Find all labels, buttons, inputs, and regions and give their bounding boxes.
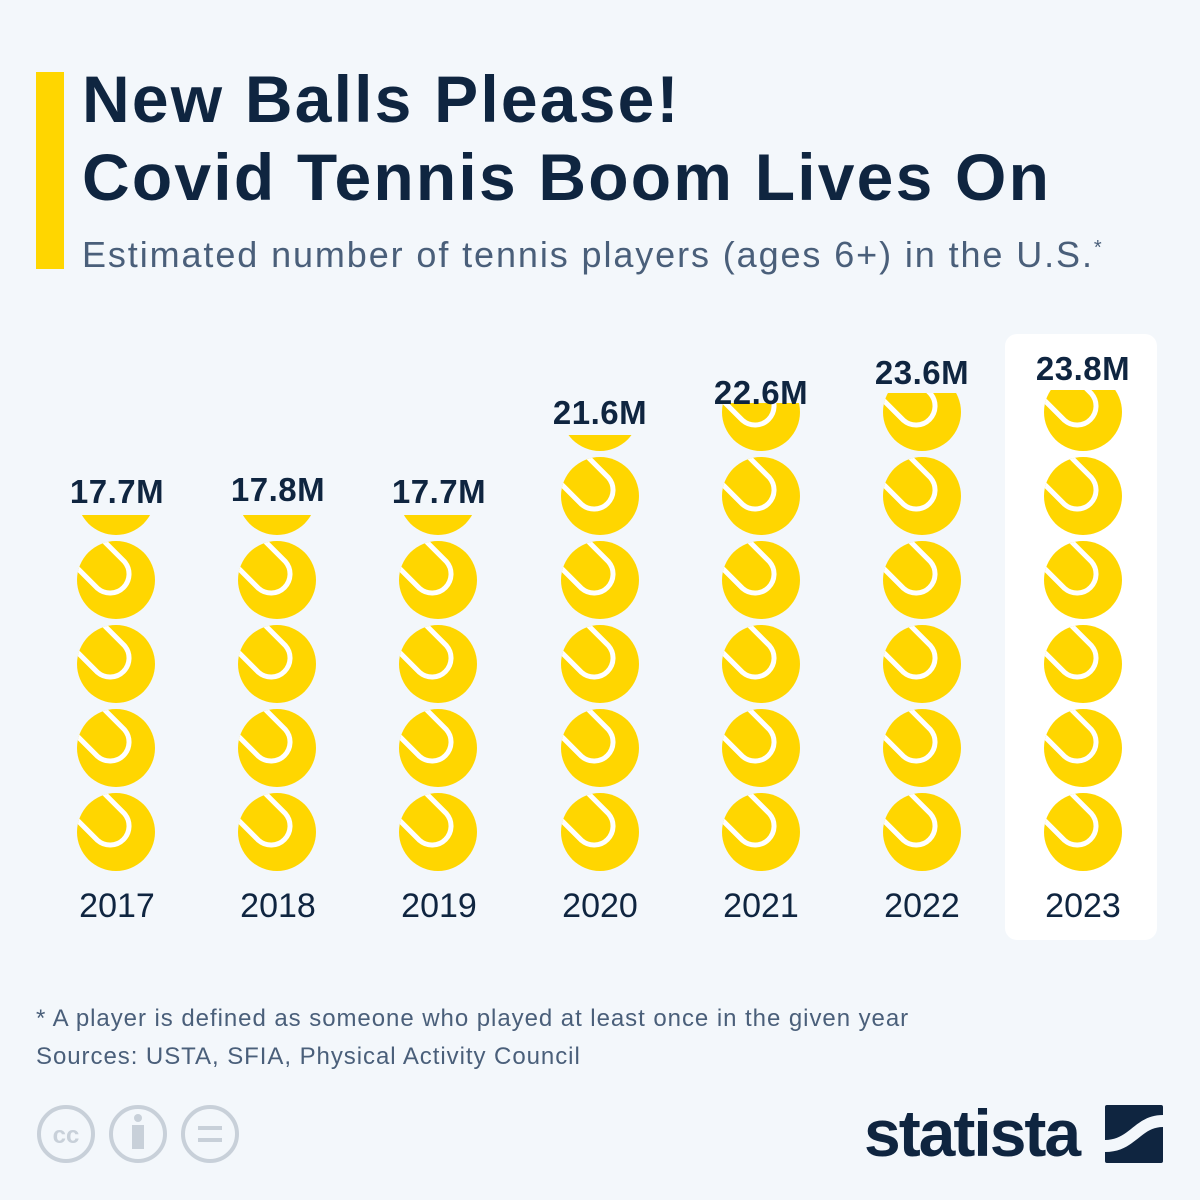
subtitle: Estimated number of tennis players (ages 6+) in the U.S.* <box>82 234 1104 275</box>
column 2017 <box>77 515 155 871</box>
accent bar <box>36 72 64 269</box>
logo icon <box>1105 1105 1163 1163</box>
value labels: 17.8M <box>231 471 325 508</box>
year labels: 2017 <box>79 887 155 925</box>
footnote: * A player is defined as someone who played at least once in the given year <box>36 1005 909 1032</box>
year labels <box>79 887 1121 925</box>
value labels: 23.8M <box>1036 350 1130 387</box>
title: Covid Tennis Boom Lives On <box>82 140 1051 214</box>
title: New Balls Please! <box>82 62 681 136</box>
year labels: 2023 <box>1045 887 1121 925</box>
logo text: statista <box>864 1096 1079 1170</box>
icons: license <box>39 1107 237 1161</box>
highlight panel 2023 <box>1005 334 1157 940</box>
value labels <box>70 350 1130 510</box>
column 2020 <box>561 435 639 871</box>
icons: license: cc <box>53 1122 79 1149</box>
year labels: 2018 <box>240 887 316 925</box>
column 2021 <box>722 403 800 871</box>
value labels: 21.6M <box>553 394 647 431</box>
value labels: 23.6M <box>875 354 969 391</box>
column 2018 <box>238 515 316 871</box>
value labels: 17.7M <box>70 473 164 510</box>
title <box>82 62 1051 214</box>
year labels: 2020 <box>562 887 638 925</box>
footnote: Sources: USTA, SFIA, Physical Activity Council <box>36 1043 581 1070</box>
value labels: 17.7M <box>392 473 486 510</box>
footnote <box>36 1005 909 1070</box>
year labels: 2019 <box>401 887 477 925</box>
column 2023 <box>1044 390 1122 871</box>
column 2022 <box>883 393 961 871</box>
value labels: 22.6M <box>714 374 808 411</box>
year labels: 2021 <box>723 887 799 925</box>
column 2019 <box>399 515 477 871</box>
chart: tennis ball pictogram <box>37 356 1163 1163</box>
year labels: 2022 <box>884 887 960 925</box>
